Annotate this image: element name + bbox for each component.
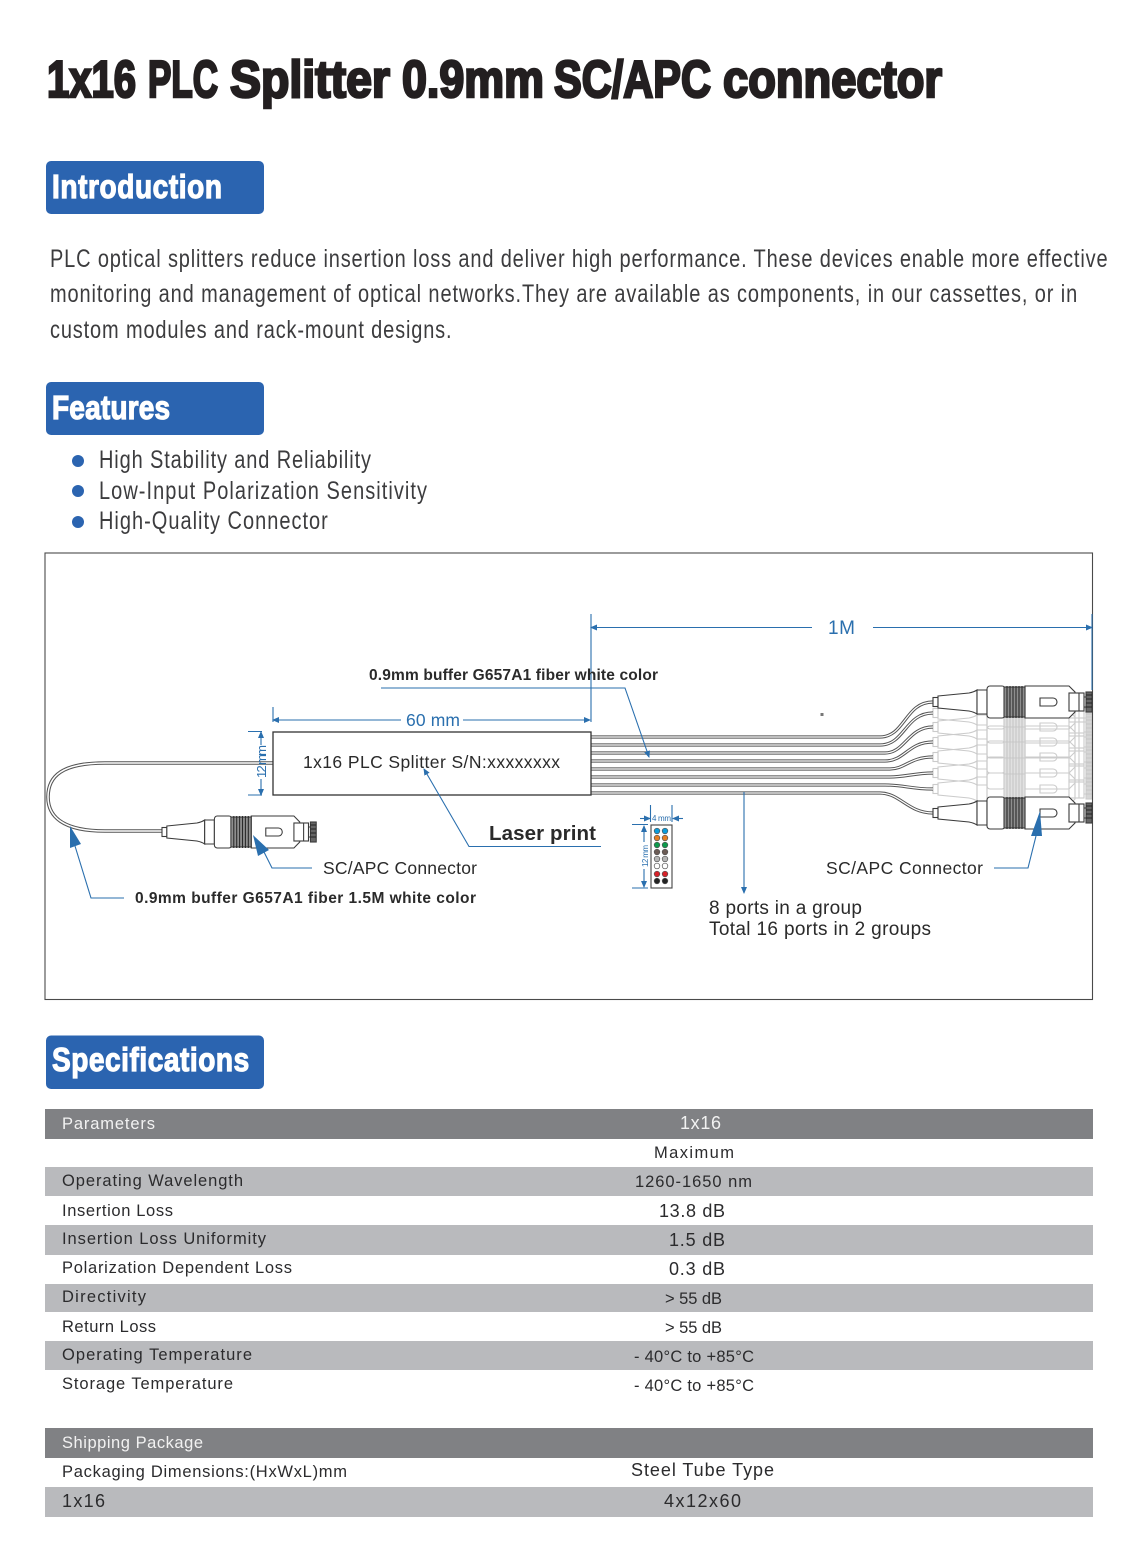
- section heading: Specifications: [46, 1036, 264, 1089]
- table: shipping package: [45, 1428, 1093, 1517]
- text block: introduction paragraph: PLC optical splitters reduce insertion loss and deliver high performance. These devices enable more effective: [50, 245, 1108, 273]
- callout: port groups: Total 16 ports in 2 groups: [709, 919, 931, 940]
- callout: output fiber: 0.9mm buffer G657A1 fiber white color: [369, 667, 658, 684]
- callout: port groups: [709, 792, 931, 940]
- text block: introduction paragraph: monitoring and management of optical networks.They are available as components, in our cassettes, or in: [50, 280, 1077, 308]
- fiber colour array: 4 mm: [652, 814, 671, 823]
- callout: port groups: 8 ports in a group: [709, 898, 862, 919]
- table: specifications: > 55 dB: [665, 1319, 722, 1337]
- callout: output fiber: [369, 667, 658, 757]
- fiber colour array: 12 mm: [641, 845, 650, 867]
- title: SC/APC: [554, 51, 711, 109]
- input fiber loop: [48, 763, 273, 831]
- input SC/APC connector: [162, 816, 316, 848]
- dimension: 1M: [591, 614, 1092, 722]
- output fan-out fibers: [591, 702, 933, 813]
- callout: input fiber: 0.9mm buffer G657A1 fiber 1.5M white color: [135, 890, 476, 907]
- table: specifications: - 40°C to +85°C: [634, 1348, 754, 1366]
- table: specifications: Insertion Loss: [62, 1202, 173, 1220]
- title: [47, 51, 942, 109]
- splitter body: [273, 732, 591, 795]
- callout: laser print: Laser print: [489, 822, 596, 845]
- table: shipping package: Packaging Dimensions:(HxWxL)mm: [62, 1463, 347, 1481]
- table: shipping package: 1x16: [62, 1491, 105, 1511]
- table: shipping package: 4x12x60: [664, 1491, 741, 1511]
- dimension: 12 mm: [248, 732, 269, 795]
- title: 0.9mm: [402, 51, 544, 109]
- section heading: Specifications: Specifications: [52, 1042, 249, 1079]
- table: specifications: 1.5 dB: [669, 1230, 725, 1250]
- text block: introduction paragraph: custom modules and rack-mount designs.: [50, 316, 452, 344]
- table: specifications: 1260-1650 nm: [635, 1173, 752, 1191]
- table: specifications: Maximum: [654, 1144, 734, 1162]
- dimension: 60 mm: 60 mm: [406, 710, 460, 730]
- table: specifications: 1x16: [680, 1113, 721, 1133]
- title: connector: [723, 51, 942, 109]
- title: PLC: [148, 51, 218, 109]
- callout: input SC/APC connector: [253, 835, 477, 878]
- table: shipping package: Steel Tube Type: [631, 1460, 774, 1480]
- table: specifications: Insertion Loss Uniformity: [62, 1230, 267, 1248]
- table: specifications: Return Loss: [62, 1318, 156, 1336]
- table: specifications: 13.8 dB: [659, 1201, 725, 1221]
- detail dot: [820, 713, 824, 716]
- table: specifications: Parameters: [62, 1115, 155, 1133]
- list: features: High Stability and Reliability: [99, 446, 372, 474]
- table: specifications: Operating Wavelength: [62, 1172, 243, 1190]
- table: specifications: [45, 1109, 1093, 1395]
- section heading: Introduction: Introduction: [52, 169, 222, 206]
- list: features: [72, 446, 428, 535]
- title: Splitter: [230, 51, 390, 109]
- title: 1x16: [47, 51, 136, 109]
- callout: input SC/APC connector: SC/APC Connector: [323, 858, 477, 878]
- callout: laser print: [424, 769, 601, 846]
- table: specifications: - 40°C to +85°C: [634, 1377, 754, 1395]
- table: shipping package: Shipping Package: [62, 1434, 203, 1452]
- fiber colour array: [632, 805, 683, 888]
- callout: output SC/APC connector: SC/APC Connector: [826, 858, 983, 878]
- list: features: Low-Input Polarization Sensitivity: [99, 477, 428, 505]
- table: specifications: Polarization Dependent Loss: [62, 1259, 292, 1277]
- table: specifications: > 55 dB: [665, 1290, 722, 1308]
- table: specifications: Directivity: [62, 1288, 147, 1306]
- ghost connectors: middle ports: [933, 697, 1092, 805]
- section heading: Features: Features: [52, 390, 170, 427]
- callout: output SC/APC connector: [826, 811, 1042, 878]
- table: specifications: Storage Temperature: [62, 1375, 233, 1393]
- section heading: Features: [46, 382, 264, 435]
- dimension: 1M: 1M: [828, 618, 855, 639]
- panel: product diagram: [45, 553, 1092, 1000]
- section heading: Introduction: [46, 161, 264, 214]
- output SC/APC connector: top: [933, 686, 1092, 718]
- callout: input fiber: [70, 826, 476, 907]
- splitter body: 1x16 PLC Splitter S/N:xxxxxxxx: [303, 752, 560, 772]
- table: specifications: 0.3 dB: [669, 1259, 725, 1279]
- list: features: High-Quality Connector: [99, 507, 328, 535]
- dimension: 12 mm: 12 mm: [254, 745, 269, 778]
- text block: introduction paragraph: [50, 245, 1108, 344]
- table: specifications: Operating Temperature: [62, 1346, 252, 1364]
- output SC/APC connector: bottom: [933, 797, 1092, 829]
